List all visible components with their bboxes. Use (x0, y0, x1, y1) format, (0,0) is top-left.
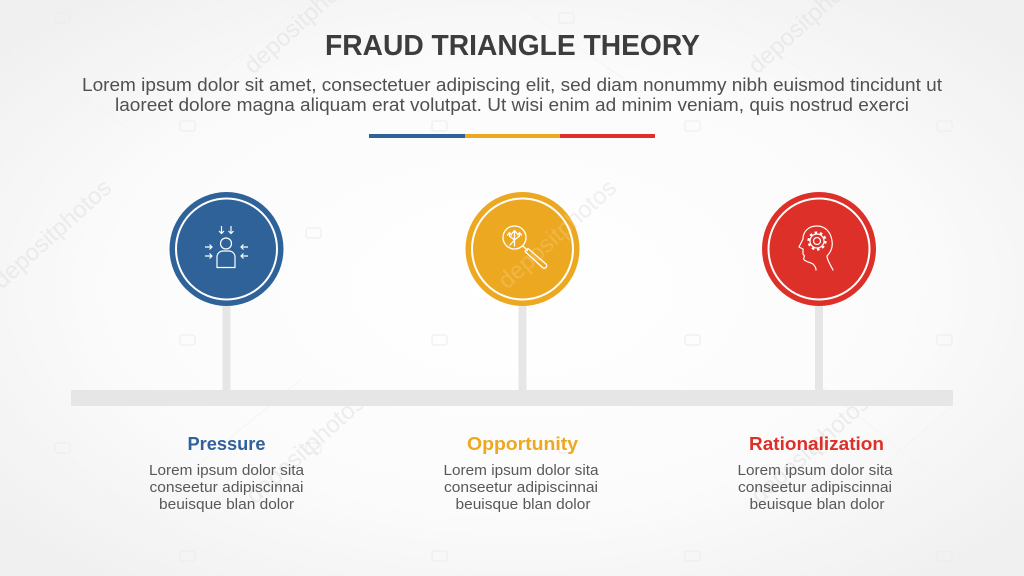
timeline bar (71, 390, 953, 406)
body text: opportunity: beuisque blan dolor (456, 497, 591, 513)
icon: magnifier with arrows (503, 226, 547, 268)
infographic canvas: depositphotos (493, 174, 622, 294)
watermark over opportunity marker: depositphotos (493, 174, 622, 294)
column: pressure (149, 433, 305, 513)
marker: pressure (170, 192, 284, 306)
stem: pressure (222, 300, 230, 390)
body text: rationalization: Lorem ipsum dolor sita (738, 463, 893, 479)
title: FRAUD TRIANGLE THEORY (325, 30, 700, 62)
marker: opportunity (466, 192, 580, 306)
stem: opportunity (518, 300, 526, 390)
icon: person under pressure (205, 226, 248, 268)
body text: rationalization (738, 463, 893, 513)
heading: opportunity: Opportunity (467, 433, 579, 454)
subtitle text block (82, 75, 942, 115)
body text: opportunity (444, 463, 599, 513)
body text: rationalization: beuisque blan dolor (750, 497, 885, 513)
column: rationalization (738, 433, 893, 513)
subtitle text block: Lorem ipsum dolor sit amet, consectetuer adipiscing elit, sed diam nonummy nibh euismod tincidunt ut (82, 75, 942, 95)
body text: rationalization: conseetur adipiscinnai (738, 480, 892, 496)
body text: pressure: conseetur adipiscinnai (150, 480, 304, 496)
heading: rationalization: Rationalization (749, 433, 884, 454)
column: opportunity (444, 433, 599, 513)
infographic canvas: depositphotos (241, 389, 370, 509)
icon: head with gear (799, 226, 833, 270)
heading: pressure: Pressure (188, 433, 266, 454)
body text: opportunity: Lorem ipsum dolor sita (444, 463, 599, 479)
infographic canvas: depositphotos (746, 389, 875, 509)
marker: rationalization (762, 192, 876, 306)
subtitle text block: laoreet dolore magna aliquam erat volutpat. Ut wisi enim ad minim veniam, quis nostrud exerci (115, 95, 909, 115)
body text: opportunity: conseetur adipiscinnai (444, 480, 598, 496)
body text: pressure: beuisque blan dolor (159, 497, 294, 513)
body text: pressure: Lorem ipsum dolor sita (149, 463, 305, 479)
tri-colour divider (369, 134, 655, 138)
body text: pressure (149, 463, 305, 513)
stem: rationalization (815, 300, 823, 390)
